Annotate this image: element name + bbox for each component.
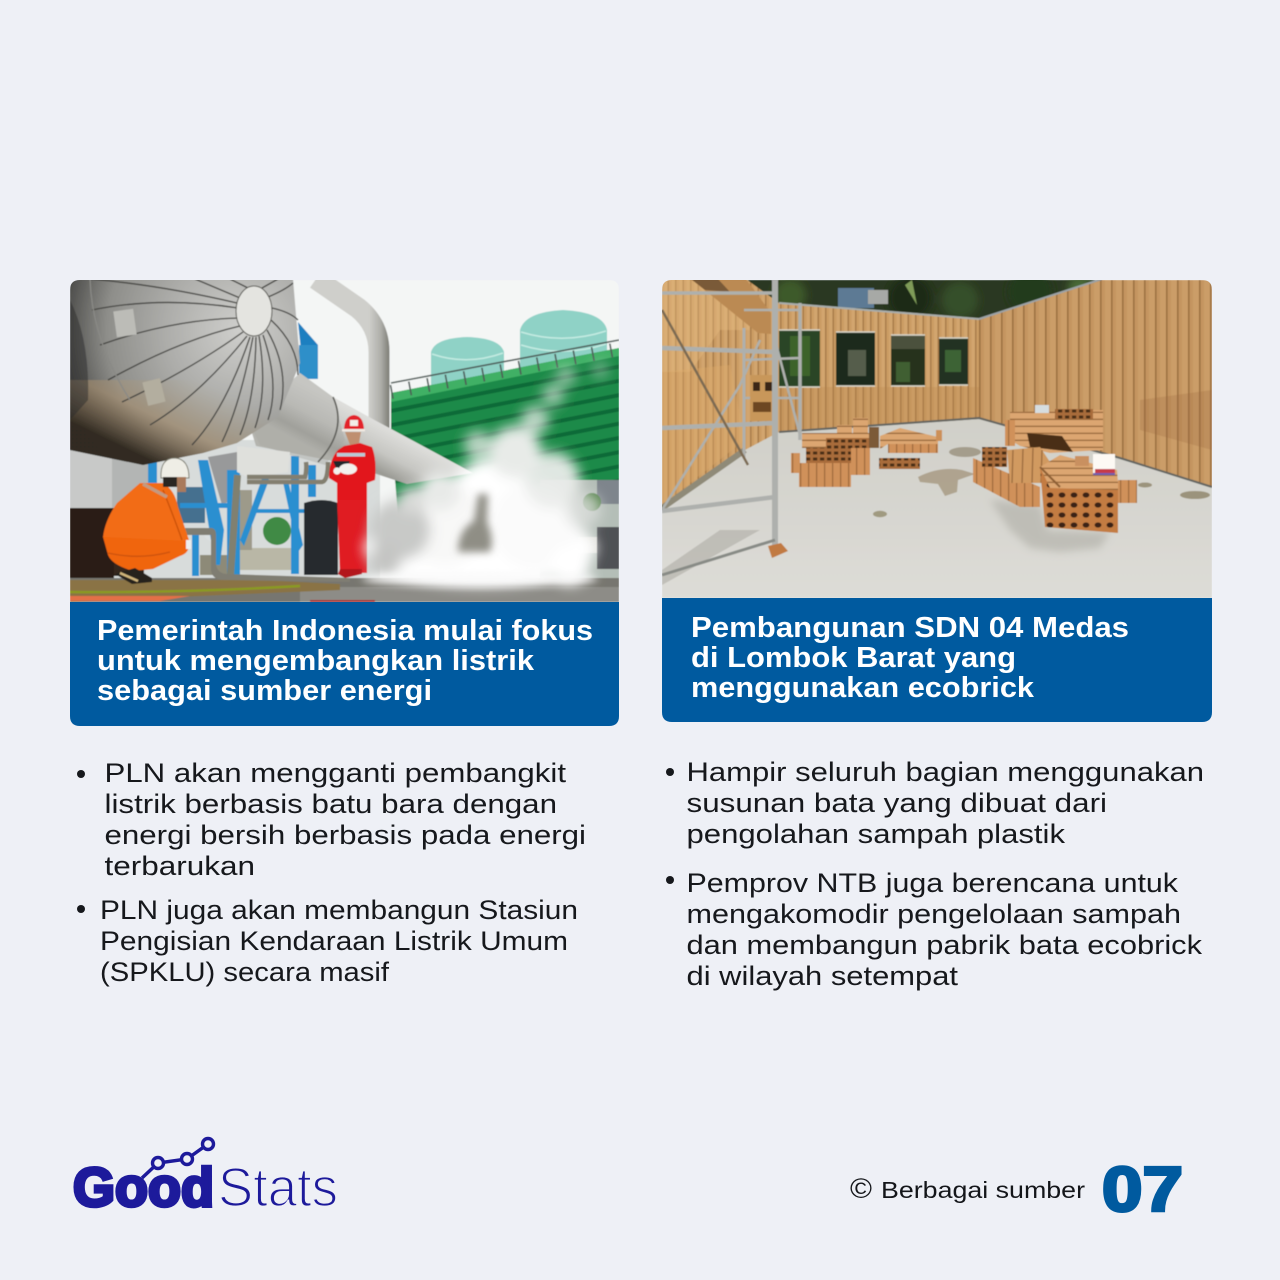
bullet list: left: PLN juga akan membangun Stasiun <box>100 895 578 925</box>
bullet list: right <box>666 757 1204 991</box>
title strip: right: Pembangunan SDN 04 Medas <box>691 612 1129 644</box>
infographic canvas <box>70 280 1212 1213</box>
bullet list: left <box>77 758 586 987</box>
title strip: left <box>70 602 619 726</box>
title strip: right: menggunakan ecobrick <box>691 672 1034 704</box>
bullet list: right: dan membangun pabrik bata ecobrick <box>686 930 1203 960</box>
pile left <box>799 463 851 487</box>
bullet list: left: Pengisian Kendaraan Listrik Umum <box>100 926 568 956</box>
photo: power plant workers and steam <box>70 279 619 602</box>
pile middle <box>888 443 938 454</box>
title strip: left: untuk mengembangkan listrik <box>97 645 534 677</box>
bullet list: right: susunan bata yang dibuat dari <box>686 788 1107 818</box>
pile right <box>973 458 1040 507</box>
logo: GoodStats: Good <box>73 1156 214 1218</box>
title strip: left: sebagai sumber energi <box>97 675 432 707</box>
page number: 07 <box>1102 1155 1183 1225</box>
bullet list: left: PLN akan mengganti pembangkit <box>104 758 567 788</box>
title strip: right: di Lombok Barat yang <box>691 642 1016 674</box>
title strip: right <box>662 598 1212 722</box>
bullet list: right: Hampir seluruh bagian menggunakan <box>686 757 1204 787</box>
bullet list: left: terbarukan <box>104 851 255 881</box>
bullet list: left: (SPKLU) secara masif <box>100 957 390 987</box>
source credit: Berbagai sumber <box>881 1177 1085 1203</box>
photo: ecobrick school construction <box>662 270 1212 598</box>
logo: GoodStats <box>73 1138 338 1218</box>
bullet list: right: Pemprov NTB juga berencana untuk <box>686 868 1179 898</box>
bullet list: right: mengakomodir pengelolaan sampah <box>686 899 1181 929</box>
panel: left card <box>70 279 619 987</box>
bullet list: right: pengolahan sampah plastik <box>686 819 1066 849</box>
panel: right card <box>662 270 1212 991</box>
scaffold <box>706 280 771 334</box>
bullet list: left: energi bersih berbasis pada energi <box>104 820 586 850</box>
source credit <box>850 1173 1085 1204</box>
title strip: left: Pemerintah Indonesia mulai fokus <box>97 615 593 647</box>
bullet list: right: di wilayah setempat <box>686 961 959 991</box>
logo: GoodStats: Stats <box>218 1156 338 1218</box>
source credit: © <box>850 1173 872 1204</box>
bullet list: left: listrik berbasis batu bara dengan <box>104 789 557 819</box>
